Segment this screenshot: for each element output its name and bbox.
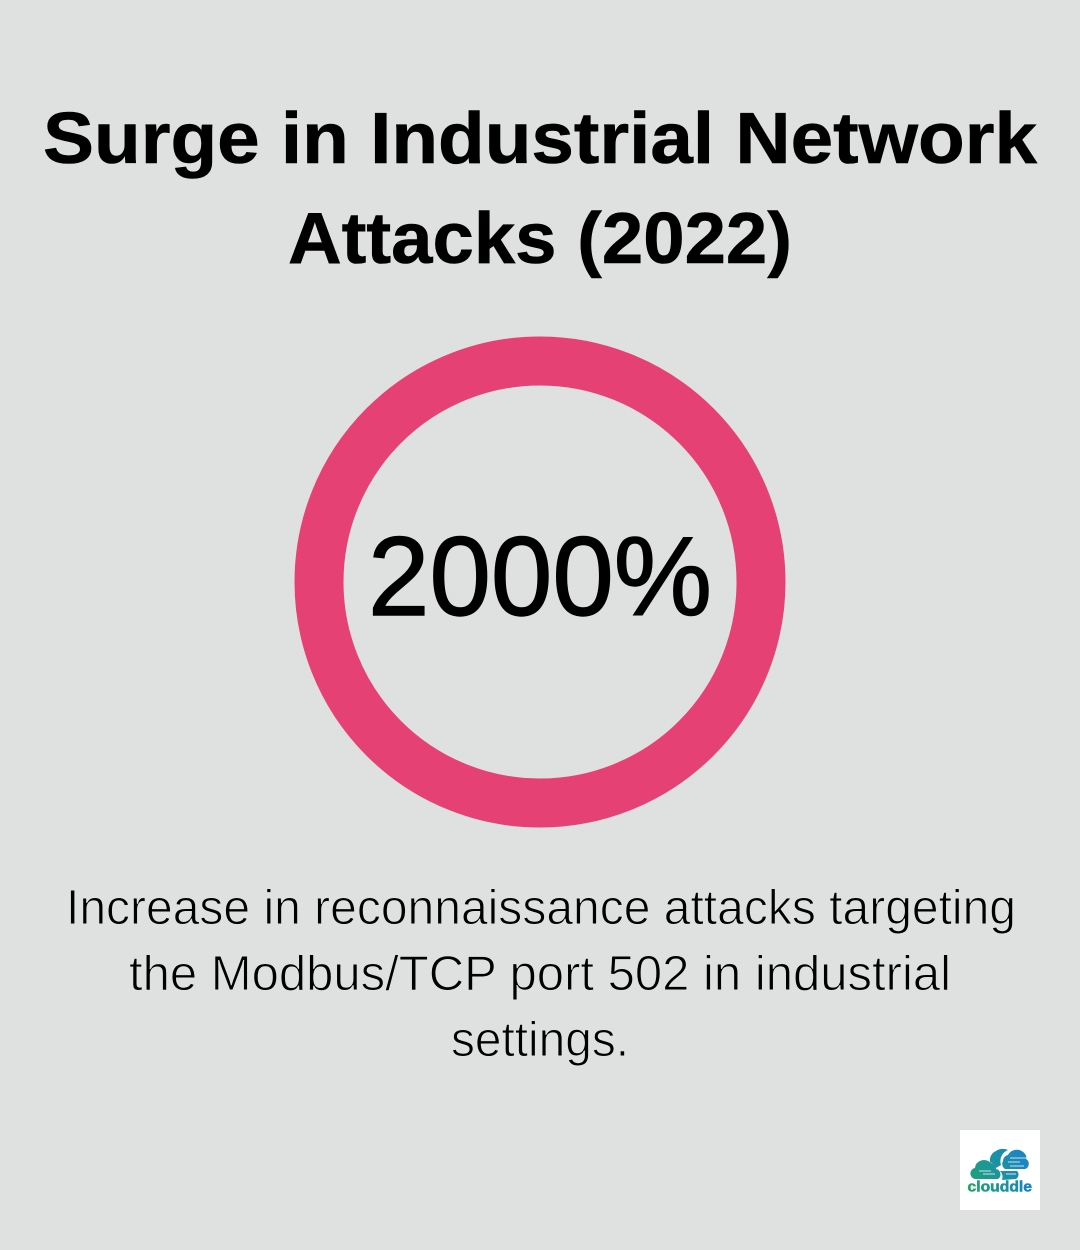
title <box>43 99 1038 279</box>
icon: right cloud <box>1002 1150 1029 1169</box>
icon: cloud crescent <box>990 1149 1008 1168</box>
description: Increase in reconnaissance attacks targeting <box>66 881 1016 935</box>
logo: clouddle <box>960 1130 1040 1210</box>
description <box>66 881 1016 1067</box>
title: Surge in Industrial Network <box>43 99 1038 179</box>
ring chart <box>319 361 761 803</box>
icon: left cloud <box>970 1160 1000 1179</box>
description: the Modbus/TCP port 502 in industrial <box>129 947 951 1001</box>
wordmark: clouddle <box>968 1178 1032 1196</box>
stat value: 2000% <box>368 514 712 639</box>
icon: lower cloud <box>1000 1171 1019 1180</box>
title: Attacks (2022) <box>288 199 792 279</box>
icon: circuit lines <box>979 1158 1026 1174</box>
description: settings. <box>451 1013 629 1067</box>
